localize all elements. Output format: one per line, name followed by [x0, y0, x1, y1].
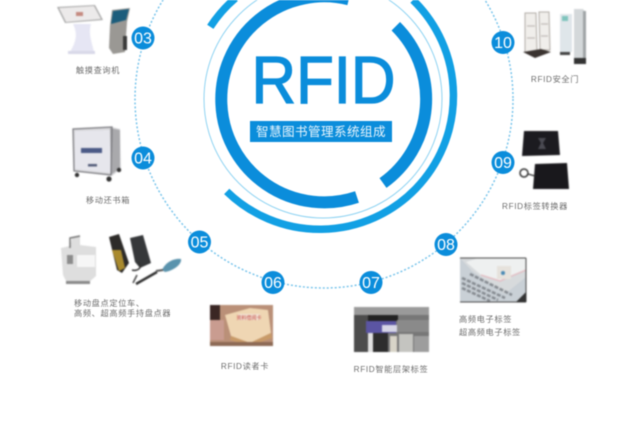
badge 04 — [132, 146, 154, 170]
badge 06 — [262, 271, 284, 294]
subtitle banner — [250, 121, 392, 142]
label: RFID smart shelf label: RFID智能层架标签 — [354, 364, 428, 374]
label: HF and UHF electronic tags: 超高频电子标签 — [459, 327, 521, 337]
photo: electronic tag on book page — [460, 258, 526, 302]
icon: touch query kiosks — [57, 5, 130, 54]
title: RFID: RFID — [252, 43, 396, 118]
badge 10 — [492, 31, 514, 54]
label: RFID tag converter: RFID标签转换器 — [502, 201, 568, 211]
label: HF and UHF electronic tags: 高频电子标签 — [459, 314, 512, 324]
badge 07: 07 — [362, 275, 380, 292]
label: mobile book return box: 移动还书箱 — [86, 195, 130, 205]
badge 03 — [132, 26, 154, 50]
badge 05 — [188, 230, 211, 254]
label: mobile inventory cart and handheld readers: 移动盘点定位车、 — [74, 298, 145, 308]
badge 07 — [360, 271, 382, 294]
badge 09: 09 — [494, 155, 512, 172]
badge 09 — [492, 151, 514, 174]
label: HF and UHF electronic tags — [459, 314, 521, 337]
label: mobile inventory cart and handheld readers: 高频、超高频手持盘点器 — [74, 308, 171, 318]
badge 04: 04 — [134, 150, 152, 168]
central RFID ring emblem — [204, 0, 453, 229]
label: RFID reader card: RFID读者卡 — [221, 361, 269, 371]
label: touch query machine: 触摸查询机 — [76, 65, 120, 75]
badge 10: 10 — [494, 35, 512, 52]
icon: mobile book return box — [73, 127, 121, 182]
badge 06: 06 — [264, 275, 282, 292]
badge 08 — [434, 233, 458, 256]
icon: RFID security gates — [523, 9, 586, 64]
subtitle banner: 智慧图书管理系统组成 — [256, 124, 386, 139]
badge 05: 05 — [191, 234, 208, 252]
label: mobile inventory cart and handheld readers — [74, 298, 171, 318]
icon: mobile inventory cart and handheld readers — [61, 234, 181, 284]
photo: RFID reader card: 资料借阅卡 — [236, 314, 262, 322]
photo: RFID smart shelf label — [354, 307, 429, 352]
dotted orbit ring — [135, 0, 513, 288]
icon: RFID tag converters — [520, 131, 569, 189]
badge 03: 03 — [134, 30, 152, 48]
photo: RFID reader card — [210, 305, 273, 346]
label: RFID security gate: RFID安全门 — [531, 74, 579, 84]
badge 08: 08 — [437, 237, 455, 254]
